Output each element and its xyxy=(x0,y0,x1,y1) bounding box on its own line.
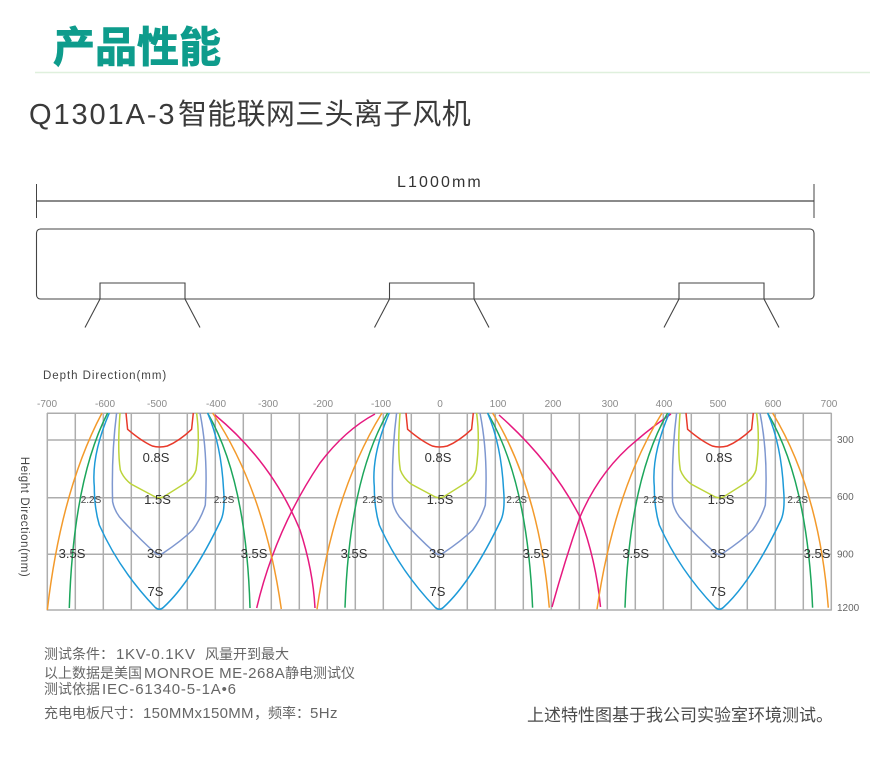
curve time labels: 3.5S xyxy=(59,546,86,561)
curve time labels: 2.2S xyxy=(81,495,102,506)
chart: ionization decay curves xyxy=(47,413,832,610)
test conditions: 风量开到最大 xyxy=(205,646,289,662)
curve time labels: 1.5S xyxy=(427,492,454,507)
head middle xyxy=(374,283,489,328)
height axis ticks: 600 xyxy=(837,492,854,503)
depth axis ticks: -400 xyxy=(206,399,226,410)
test conditions: 测试条件： xyxy=(44,646,114,662)
test conditions: 1KV-0.1KV xyxy=(116,646,196,663)
depth axis ticks: -100 xyxy=(371,399,391,410)
depth axis ticks xyxy=(37,399,838,410)
depth axis ticks: -300 xyxy=(258,399,278,410)
curve time labels: 3.5S xyxy=(341,546,368,561)
depth axis ticks: -500 xyxy=(147,399,167,410)
test conditions: 频率： xyxy=(268,705,310,721)
curve time labels xyxy=(59,450,831,599)
depth axis ticks: 600 xyxy=(765,399,782,410)
title: 产品性能 xyxy=(53,24,221,71)
height axis ticks: 900 xyxy=(837,550,854,560)
curve set: left head xyxy=(47,413,281,610)
curve time labels: 3S xyxy=(710,546,726,561)
curve time labels: 3.5S xyxy=(804,546,831,561)
curve time labels: 3S xyxy=(429,546,445,561)
test conditions: IEC-61340-5-1A•6 xyxy=(102,681,237,698)
depth axis ticks: 200 xyxy=(545,399,562,410)
curve time labels: 2.2S xyxy=(643,495,664,506)
depth axis ticks: -200 xyxy=(313,399,333,410)
curve time labels: 0.8S xyxy=(143,450,170,465)
curve time labels: 0.8S xyxy=(425,450,452,465)
test conditions: 5Hz xyxy=(310,705,338,722)
head right xyxy=(664,283,779,328)
axis title: height: Height Direction(mm) xyxy=(18,457,30,577)
dimension line: L1000mm: L1000mm xyxy=(397,174,483,191)
curve time labels: 2.2S xyxy=(214,495,235,506)
depth axis ticks: 0 xyxy=(437,399,443,410)
footnote: 上述特性图基于我公司实验室环境测试。 xyxy=(527,706,833,725)
curve time labels: 7S xyxy=(710,584,726,599)
depth axis ticks: 400 xyxy=(656,399,673,410)
depth axis ticks: 700 xyxy=(821,399,838,410)
magenta curves xyxy=(215,414,671,608)
curve time labels: 1.5S xyxy=(144,492,171,507)
subtitle: 智能联网三头离子风机 xyxy=(178,98,471,131)
height axis ticks: 1200 xyxy=(837,603,860,614)
test conditions xyxy=(44,646,355,722)
curve time labels: 7S xyxy=(430,584,446,599)
depth axis ticks: -700 xyxy=(37,399,57,410)
subtitle: Q1301A-3 xyxy=(29,99,176,131)
test conditions: 150MMx150MM， xyxy=(143,705,269,722)
curve set: middle head xyxy=(317,413,549,609)
test conditions: 充电电板尺寸： xyxy=(44,705,142,721)
height axis ticks: 300 xyxy=(837,435,854,446)
curve time labels: 0.8S xyxy=(706,450,733,465)
curve time labels: 3.5S xyxy=(622,546,649,561)
depth axis ticks: 300 xyxy=(602,399,619,410)
test conditions: MONROE ME-268A xyxy=(144,665,285,682)
curve time labels: 2.2S xyxy=(362,495,383,506)
axis title: depth: Depth Direction(mm) xyxy=(43,370,167,382)
curve time labels: 2.2S xyxy=(506,495,527,506)
device diagram: three-head ion fan xyxy=(36,229,814,328)
test conditions: 测试依据 xyxy=(44,681,100,697)
depth axis ticks: -600 xyxy=(95,399,115,410)
curve time labels: 2.2S xyxy=(787,495,808,506)
test conditions: 静电测试仪 xyxy=(285,665,355,681)
depth axis ticks: 500 xyxy=(710,399,727,410)
curve time labels: 7S xyxy=(148,584,164,599)
depth axis ticks: 100 xyxy=(490,399,507,410)
grid xyxy=(47,413,832,610)
curve time labels: 1.5S xyxy=(708,492,735,507)
curve time labels: 3.5S xyxy=(523,546,550,561)
test conditions: 以上数据是美国 xyxy=(44,665,142,681)
curve time labels: 3S xyxy=(147,546,163,561)
curve set: right head xyxy=(597,413,828,609)
curve time labels: 3.5S xyxy=(241,546,268,561)
head left xyxy=(85,283,200,328)
height axis ticks xyxy=(837,435,860,614)
